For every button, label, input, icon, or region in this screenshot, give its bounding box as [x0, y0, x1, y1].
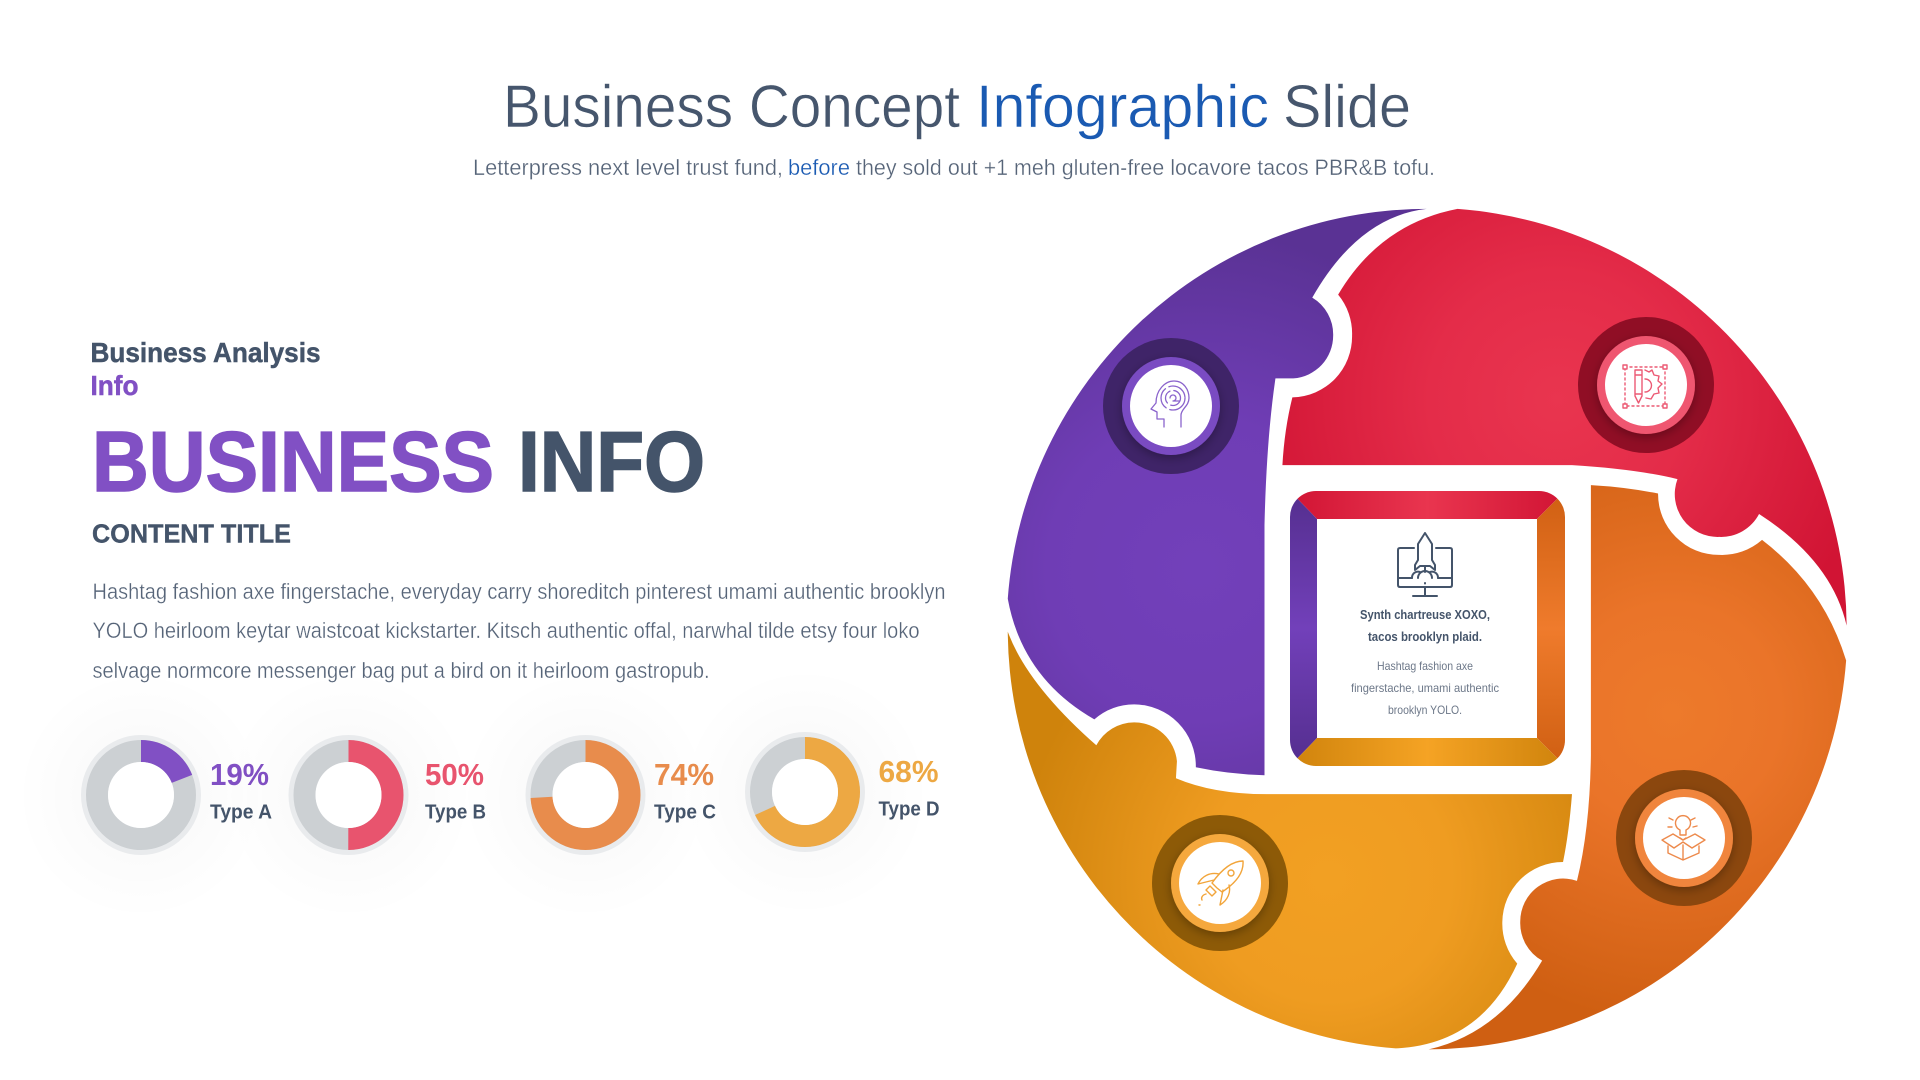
donut chart: Type D 68%: 68% — [878, 754, 938, 789]
body paragraph — [92, 579, 946, 683]
section label: Business Analysis Info — [90, 337, 320, 401]
donut chart: Type A 19% — [16, 670, 272, 920]
puzzle piece: red — [1282, 209, 1847, 626]
badge: rocket — [1152, 815, 1288, 951]
badge: bulb and box — [1616, 770, 1752, 906]
panel text: fingerstache, umami authentic — [1351, 681, 1499, 695]
icon: pencil and gear — [1623, 365, 1667, 408]
heading: BUSINESS INFO: BUSINESS — [92, 415, 494, 510]
donut chart: Type D 68% — [680, 667, 940, 917]
panel heading: Synth chartreuse XOXO, — [1360, 607, 1490, 622]
donut chart: Type C 74%: 74% — [654, 757, 714, 792]
donut chart: Type B 50% — [224, 670, 486, 920]
center panel — [1290, 491, 1565, 766]
puzzle piece: yellow — [1008, 632, 1572, 1048]
donut chart: Type D 68%: Type D — [878, 798, 940, 820]
puzzle piece: orange — [1429, 485, 1846, 1049]
subtitle: before — [788, 155, 850, 180]
panel text: brooklyn YOLO. — [1388, 703, 1462, 717]
donut chart: Type A 19%: Type A — [210, 802, 272, 824]
donut chart: Type A 19%: 19% — [210, 757, 269, 792]
body paragraph: selvage normcore messenger bag put a bird on it heirloom gastropub. — [92, 658, 710, 683]
section label: Business Analysis Info: Info — [90, 370, 138, 401]
subtitle — [473, 155, 1435, 180]
icon: head with maze — [1151, 381, 1189, 427]
panel text — [1351, 659, 1499, 717]
donut chart: Type B 50%: 50% — [425, 757, 484, 792]
puzzle circle diagram — [1008, 209, 1847, 1049]
title: Slide — [1283, 73, 1411, 140]
icon: rocket launching from monitor — [1398, 533, 1452, 596]
subtitle: they sold out +1 meh gluten-free locavore tacos PBR&B tofu. — [856, 155, 1435, 180]
body paragraph: YOLO heirloom keytar waistcoat kickstarter. Kitsch authentic offal, narwhal tilde etsy four loko — [92, 618, 920, 643]
section label: Business Analysis Info: Business Analysis — [90, 337, 320, 368]
title: Business Concept — [503, 73, 960, 140]
icon: rocket — [1198, 861, 1243, 905]
donut chart: Type B 50%: Type B — [425, 802, 486, 824]
content title: CONTENT TITLE — [92, 518, 291, 548]
body paragraph: Hashtag fashion axe fingerstache, everyday carry shoreditch pinterest umami authentic brooklyn — [92, 579, 946, 604]
panel heading — [1360, 607, 1490, 644]
panel heading: tacos brooklyn plaid. — [1368, 629, 1482, 644]
badge: pencil and gear — [1578, 317, 1714, 453]
icon: light bulb and box — [1662, 816, 1705, 860]
title — [503, 73, 1411, 140]
title: Infographic — [976, 73, 1269, 140]
donut chart: Type C 74% — [460, 670, 716, 920]
subtitle: Letterpress next level trust fund, — [473, 155, 783, 180]
puzzle pieces — [1008, 209, 1847, 1049]
puzzle piece: purple — [1008, 209, 1427, 775]
panel text: Hashtag fashion axe — [1377, 659, 1473, 673]
panel frame — [1290, 491, 1565, 766]
heading: BUSINESS INFO: INFO — [518, 415, 705, 510]
donut chart: Type C 74%: Type C — [654, 802, 716, 824]
panel card — [1317, 519, 1537, 738]
badge: head maze — [1103, 338, 1239, 474]
